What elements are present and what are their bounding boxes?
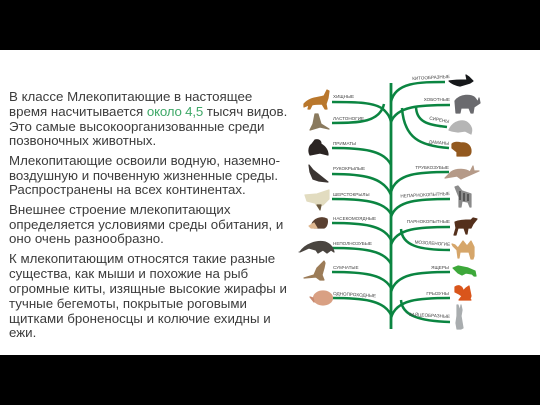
icon: iguana <box>453 266 476 276</box>
right branch labels: ДАМАНЫ <box>429 139 449 146</box>
paragraph: examples: огромные киты, изящные высокие жирафы и <box>9 281 287 296</box>
left branch labels: РУКОКРЫЛЫЕ <box>333 166 365 171</box>
left branch labels: НЕПОЛНОЗУБЫЕ <box>333 241 372 246</box>
right branch labels: КИТООБРАЗНЫЕ <box>412 74 450 81</box>
right branch labels: ЗАЙЦЕОБРАЗНЫЕ <box>409 310 450 319</box>
right branch labels: ПАРНОКОПЫТНЫЕ <box>407 219 450 224</box>
right branch labels: ТРУБКОЗУБЫЕ <box>415 165 449 170</box>
paragraph: external structure <box>9 202 283 246</box>
icon: kangaroo <box>304 261 325 280</box>
paragraph: number of species <box>9 89 287 148</box>
paragraph: habitats: воздушную и почвенную жизненные среды. <box>9 168 278 183</box>
right branch labels: ЯЩЕРЫ <box>431 265 449 270</box>
right branch labels: СИРЕНЫ <box>429 116 450 124</box>
icon: moose <box>454 218 477 235</box>
icon: sea lion <box>310 114 329 130</box>
left branch labels: ХИЩНЫЕ <box>333 94 354 99</box>
left branch labels: ПРИМАТЫ <box>333 141 356 146</box>
paragraph: examples: тучные бегемоты, покрытые роговыми <box>9 296 247 311</box>
right branch labels: ХОБОТНЫЕ <box>424 97 450 102</box>
paragraph: examples: К млекопитающим относятся такие разные <box>9 251 275 266</box>
paragraph: examples <box>9 251 287 340</box>
icon: camel <box>452 241 474 259</box>
paragraph: examples: щитками броненосцы и колючие ехидны и <box>9 311 271 326</box>
left branch labels: НАСЕКОМОЯДНЫЕ <box>333 216 376 221</box>
icon: hedgehog <box>309 218 327 228</box>
left branch labels: ОДНОПРОХОДНЫЕ <box>333 291 376 298</box>
tree trunk and branches <box>332 82 450 329</box>
paragraph: examples: существа, как мыши и похожие на рыб <box>9 266 248 281</box>
paragraph: external structure: определяется условиями среды обитания, и <box>9 217 283 232</box>
right branch labels: ГРЫЗУНЫ <box>426 291 449 296</box>
icon: orca <box>449 75 473 86</box>
icon: echidna <box>310 291 332 305</box>
paragraph: external structure: Внешнее строение млекопитающих <box>9 202 230 217</box>
icon: squirrel <box>455 286 471 300</box>
icon: flying lemur <box>305 190 329 210</box>
icon: aardvark <box>445 166 479 179</box>
paragraph: number of species: В классе Млекопитающие в настоящее <box>9 89 252 104</box>
right branch labels <box>400 74 450 319</box>
icon: zebra <box>455 186 471 207</box>
icon: hyrax <box>452 142 471 156</box>
left branch labels: ШЕРСТОКРЫЛЫ <box>333 192 370 197</box>
paragraph: habitats: Млекопитающие освоили водную, наземно- <box>9 153 280 168</box>
left branch labels: СУМЧАТЫЕ <box>333 265 359 270</box>
icon: chimpanzee <box>309 140 328 155</box>
paragraph: number of species: время насчитывается около 4,5 тысяч видов. <box>9 104 287 119</box>
right branch labels: НЕПАРНОКОПЫТНЫЕ <box>400 191 450 199</box>
icon: bat <box>309 165 328 182</box>
paragraph: examples: ежи. <box>9 325 36 340</box>
paragraph: number of species: позвоночных животных. <box>9 133 156 148</box>
icon: manatee <box>449 121 472 134</box>
speck <box>298 252 300 253</box>
icon: cheetah <box>304 90 329 109</box>
text block: description of mammals <box>9 89 287 340</box>
right branch labels: МОЗОЛЕНОГИЕ <box>415 240 450 247</box>
top black bar <box>0 0 540 50</box>
icon: anteater <box>300 241 334 253</box>
bottom black bar <box>0 355 540 405</box>
left branch labels <box>333 94 376 298</box>
paragraph: habitats: Распространены на всех континентах. <box>9 182 246 197</box>
icon: hare <box>456 305 463 329</box>
paragraph: habitats <box>9 153 280 197</box>
paragraph: external structure: оно очень разнообразно. <box>9 231 164 246</box>
icon: elephant <box>455 95 480 113</box>
left branch labels: ЛАСТОНОГИЕ <box>333 116 364 121</box>
paragraph: number of species: Это самые высокоорганизованные среди <box>9 119 264 134</box>
